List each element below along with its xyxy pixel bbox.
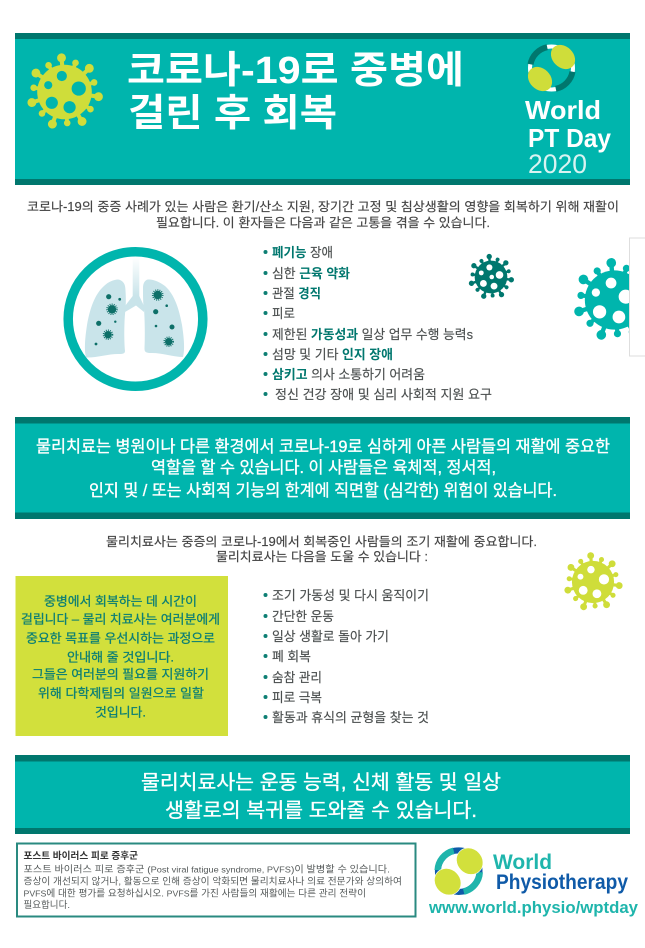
icon: teal virus clipped <box>574 258 629 340</box>
website url: www.world.physio/wptday <box>428 898 639 917</box>
symptoms list: 정신 건강 장애 및 심리 사회적 지원 요구 <box>275 387 492 402</box>
banner: return to daily life <box>15 755 630 834</box>
intro text <box>27 200 619 230</box>
symptoms list: 심한 근육 약화 <box>272 266 350 281</box>
callout: recovery takes time: 걸립니다 – 물리 치료사는 여러분에게 <box>21 612 220 626</box>
banner: role of physiotherapy: 인지 및 / 또는 사회적 기능의 한계에 직면할 (심각한) 위험이 있습니다. <box>89 481 557 500</box>
callout: recovery takes time <box>16 576 228 736</box>
symptoms list: 섬망 및 기타 인지 장애 <box>272 347 393 362</box>
list: what physiotherapists help with: 일상 생활로 돌아 가기 <box>272 629 389 644</box>
list: what physiotherapists help with: 폐 회복 <box>272 649 311 664</box>
title: 걸린 후 회복 <box>128 93 337 135</box>
logo: World Physiotherapy: Physiotherapy <box>496 871 628 894</box>
icon: dark teal virus <box>466 252 516 301</box>
logo: World PT Day 2020: PT Day <box>528 123 611 153</box>
list: what physiotherapists help with: 활동과 휴식의 균형을 찾는 것 <box>272 710 429 725</box>
title <box>127 50 464 135</box>
thin frame at right edge <box>630 238 645 356</box>
banner: role of physiotherapy <box>15 417 630 519</box>
callout: recovery takes time: 안내해 줄 것입니다. <box>67 650 174 664</box>
callout: recovery takes time: 중요한 목표를 우선시하는 과정으로 <box>26 632 215 646</box>
text: physiotherapists help <box>106 535 537 564</box>
icon: lime virus small <box>561 550 625 613</box>
callout: recovery takes time: 그들은 여러분의 필요를 지원하기 <box>32 668 209 682</box>
list: what physiotherapists help with <box>264 588 429 725</box>
text: physiotherapists help: 물리치료사는 중증의 코로나-19에서 회복중인 사람들의 조기 재활에 중요합니다. <box>106 535 537 549</box>
list: what physiotherapists help with: 조기 가동성 및 다시 움직이기 <box>272 588 429 603</box>
symptoms list <box>264 245 492 402</box>
symptoms list: 제한된 가동성과 일상 업무 수행 능력s <box>272 327 473 342</box>
panel: post viral fatigue syndrome: 포스트 바이러스 피로 증후군 <box>24 850 138 862</box>
symptoms list: 피로 <box>272 306 295 321</box>
icon: lime virus <box>23 50 106 132</box>
logo: World Physiotherapy <box>429 842 628 900</box>
callout: recovery takes time: 것입니다. <box>95 706 146 720</box>
symptoms list: 관절 경직 <box>272 286 321 301</box>
banner: role of physiotherapy: 역할을 할 수 있습니다. 이 사람들은 육체적, 정서적, <box>151 458 496 477</box>
banner: return to daily life: 물리치료사는 운동 능력, 신체 활동 및 일상 <box>141 771 501 794</box>
intro text: 코로나-19의 중증 사례가 있는 사람은 환기/산소 지원, 장기간 고정 및 침상생활의 영향을 회복하기 위해 재활이 <box>27 200 619 214</box>
list: what physiotherapists help with: 숨참 관리 <box>272 670 322 685</box>
logo: World PT Day 2020 <box>523 40 611 179</box>
logo: World PT Day 2020: World <box>525 95 601 125</box>
symptoms list: 폐기능 장애 <box>272 245 333 260</box>
text: physiotherapists help: 물리치료사는 다음을 도울 수 있습니다 : <box>216 550 428 564</box>
header banner <box>15 33 630 185</box>
panel: post viral fatigue syndrome: 증상이 개선되지 않거나, 활동으로 인해 증상이 악화되면 물리치료사나 의료 전문가와 상의하여 <box>24 876 402 888</box>
banner: return to daily life: 생활로의 복귀를 도와줄 수 있습니다. <box>165 799 477 822</box>
panel: post viral fatigue syndrome <box>17 844 416 916</box>
logo: World Physiotherapy: World <box>493 851 552 874</box>
panel: post viral fatigue syndrome: PVFS에 대한 평가를 요청하십시오. PVFS를 가진 사람들의 재활에는 다른 관리 전략이 <box>24 888 366 900</box>
banner: role of physiotherapy: 물리치료는 병원이나 다른 환경에서 코로나-19로 심하게 아픈 사람들의 재활에 중요한 <box>36 437 610 456</box>
panel: post viral fatigue syndrome: 필요합니다. <box>24 899 70 911</box>
list: what physiotherapists help with: 간단한 운동 <box>272 609 334 624</box>
panel: post viral fatigue syndrome: 포스트 바이러스 피로 증후군 ( Post viral fatigue syndrome, PVFS )이 발병할 수 있습니다. <box>24 864 390 876</box>
list: what physiotherapists help with: 피로 극복 <box>272 690 322 705</box>
logo: World PT Day 2020: 2020 <box>528 149 587 179</box>
icon: lungs in circle <box>68 252 203 386</box>
symptoms list: 삼키고 의사 소통하기 어려움 <box>272 367 425 382</box>
callout: recovery takes time: 중병에서 회복하는 데 시간이 <box>44 594 197 608</box>
intro text: 필요합니다. 이 환자들은 다음과 같은 고통을 겪을 수 있습니다. <box>156 216 490 230</box>
title: 코로나-19로 중병에 <box>127 50 464 92</box>
callout: recovery takes time: 위해 다학제팀의 일원으로 일할 <box>38 686 205 700</box>
